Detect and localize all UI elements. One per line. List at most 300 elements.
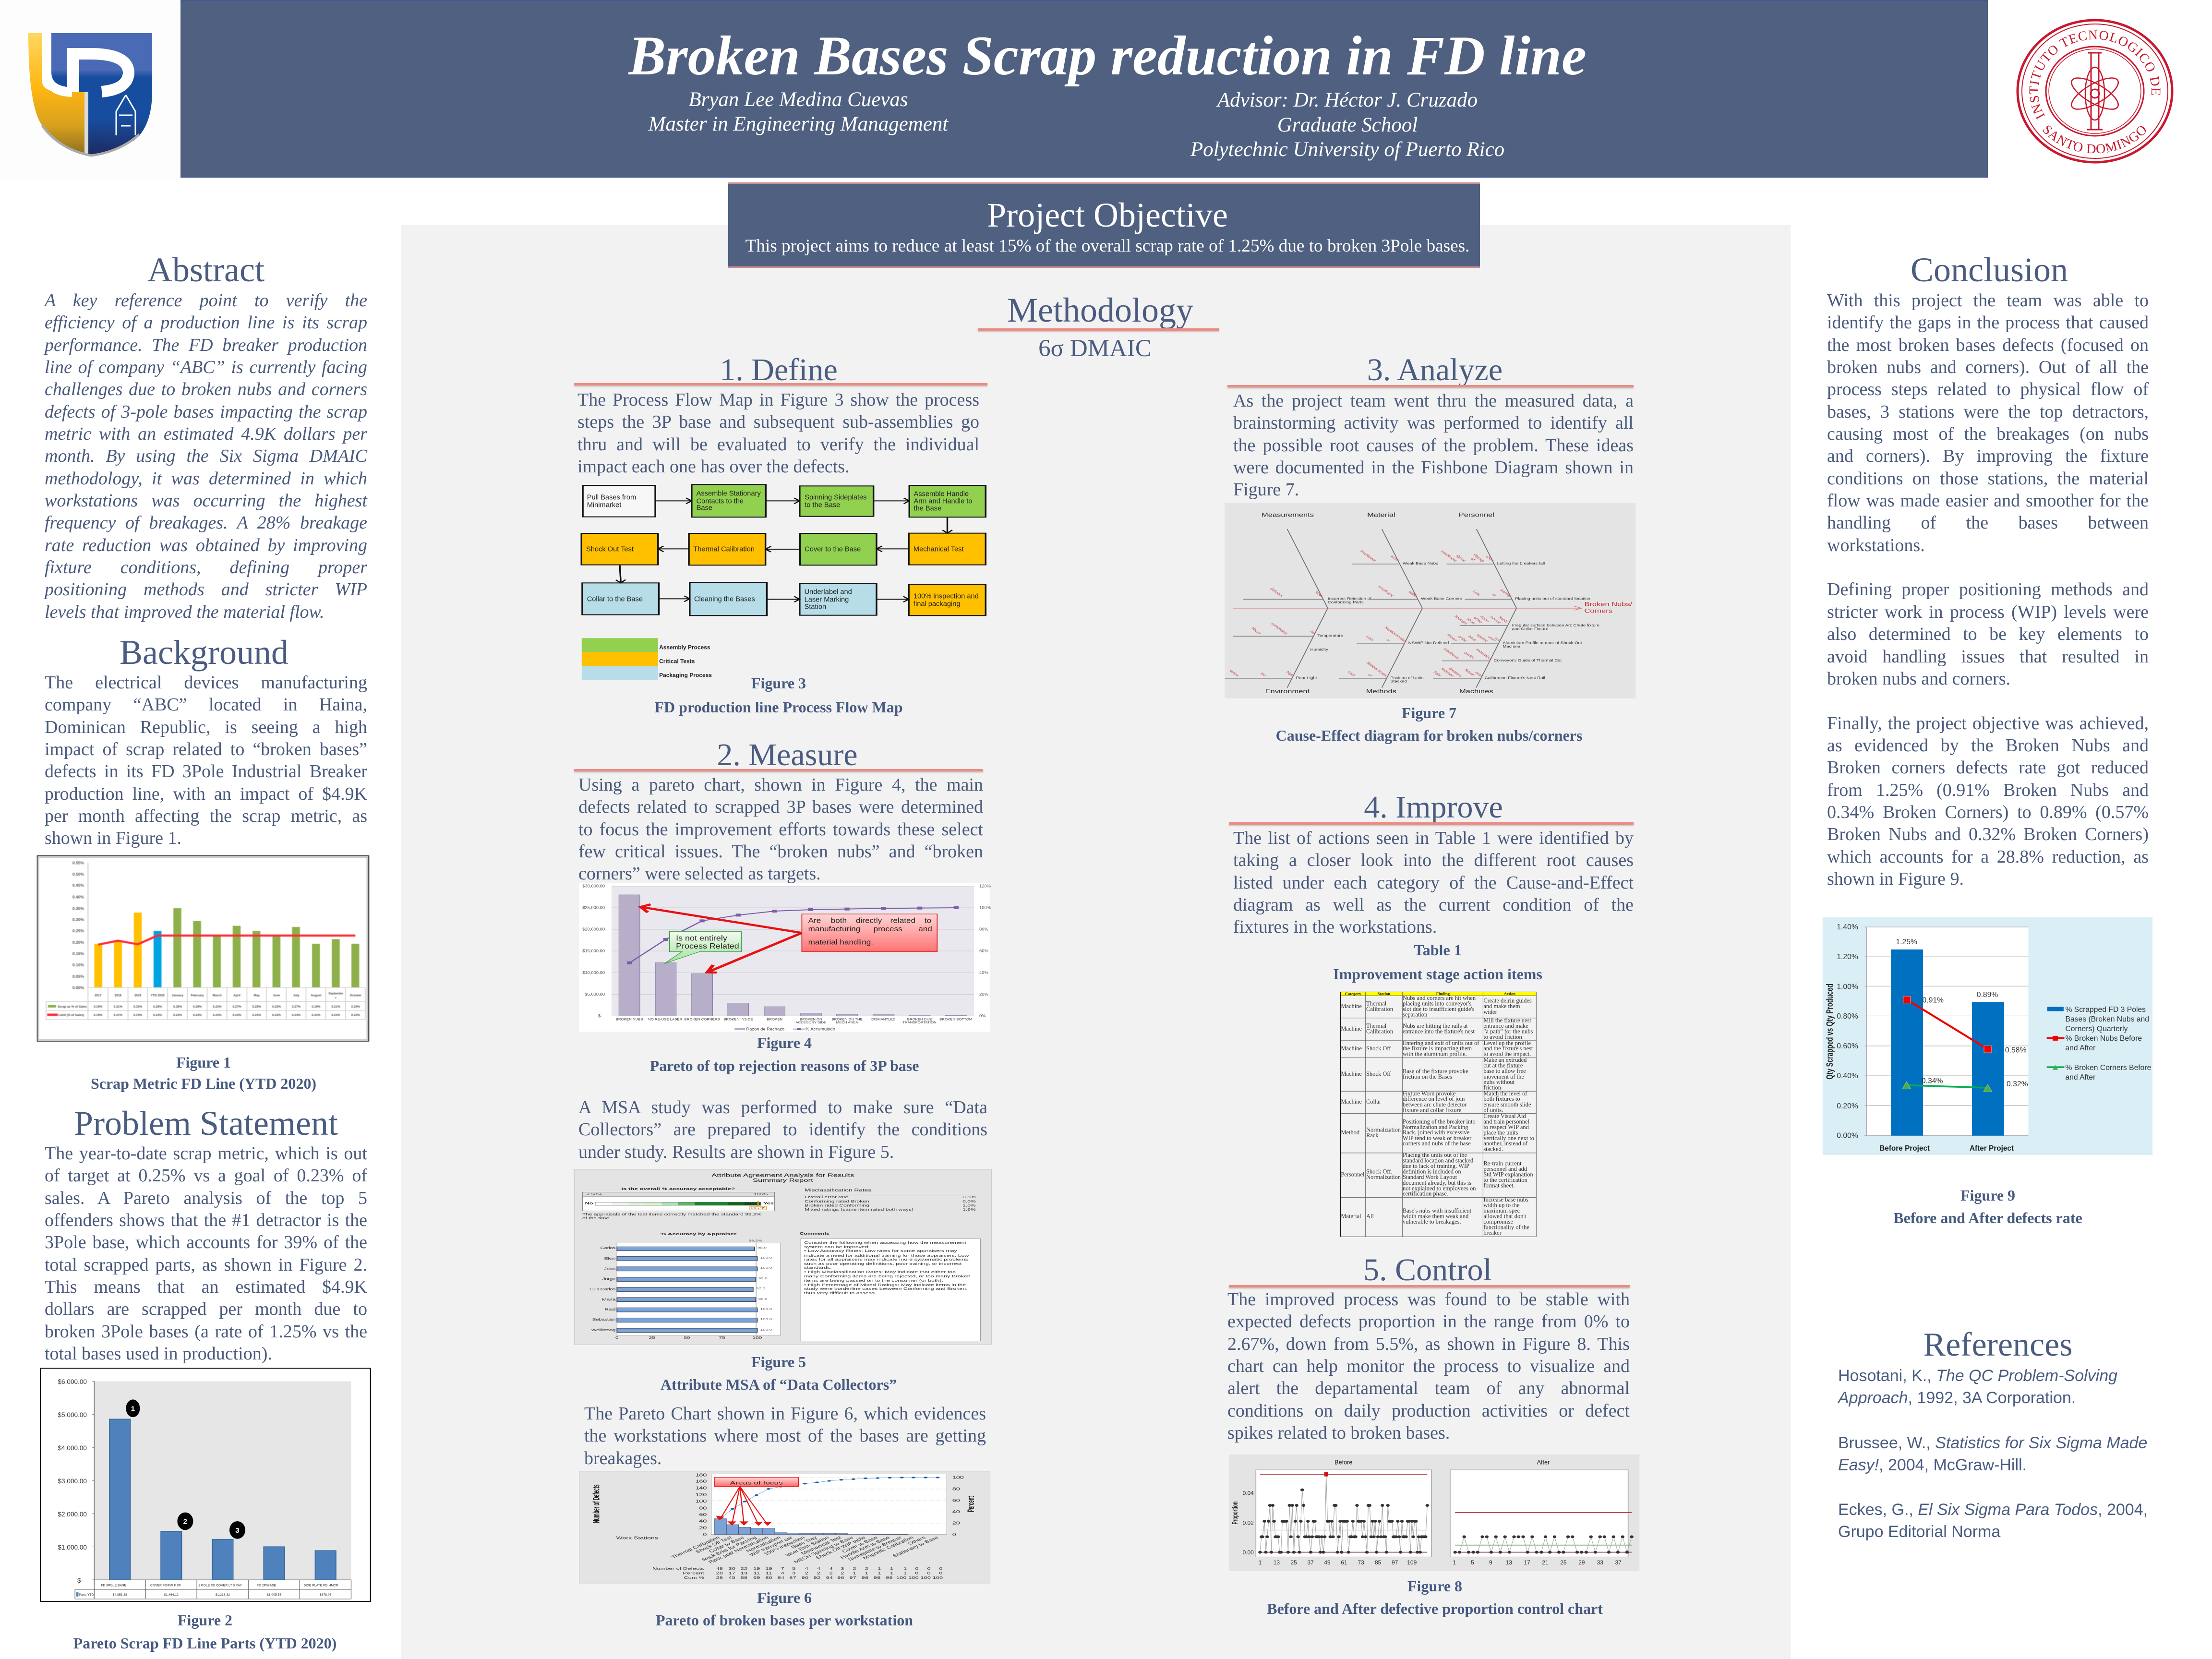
- data table: 19: [753, 1567, 760, 1571]
- y axis labels: 0.55%: [72, 861, 84, 866]
- sub-cause labels: of: [1384, 638, 1391, 642]
- sub-cause labels: [1228, 550, 1513, 678]
- data table: 1: [903, 1567, 907, 1571]
- accuracy by appraiser chart: 100.0: [760, 1328, 772, 1331]
- improve text: The list of actions seen in Table 1 were identified by: [1233, 828, 1634, 848]
- chart legend: [2047, 1006, 2152, 1082]
- data table: 19: [765, 1567, 772, 1571]
- conclusion text: identify the gaps in the process that caused: [1827, 313, 2149, 333]
- axis labels: 80%: [979, 927, 988, 932]
- table cells: Standard Work Layout: [1403, 1174, 1457, 1180]
- define text: impact each one has over the defects.: [577, 457, 850, 477]
- sub-cause labels: fixture: [1463, 669, 1476, 676]
- table cells: Nubs are hitting the rails at: [1403, 1022, 1468, 1029]
- data table: 0.23%: [252, 1013, 261, 1017]
- flow labels: final packaging: [914, 601, 961, 608]
- axis labels: 20%: [979, 992, 988, 997]
- y axis labels: 1.00%: [1837, 983, 1858, 991]
- axes labels: 0: [952, 1532, 956, 1537]
- sub-cause labels: of the: [1456, 635, 1468, 642]
- y labels: [58, 1378, 87, 1584]
- table cells: definition is included on: [1403, 1168, 1461, 1175]
- table cells: between arc chute detector: [1403, 1101, 1467, 1108]
- measure text: defects related to scrapped 3P bases were determined: [578, 797, 983, 817]
- accuracy by appraiser chart: Luis Carlos: [589, 1287, 616, 1291]
- figure 5 caption: [661, 1353, 897, 1393]
- sub-cause labels: Placing: [1472, 553, 1486, 563]
- axis labels: $-: [598, 1014, 602, 1018]
- y axis labels: 0.00%: [1837, 1132, 1858, 1140]
- figure 4 caption: Pareto of top rejection reasons of 3P base: [650, 1057, 919, 1074]
- flow labels: Assemble Stationary: [697, 490, 761, 498]
- sub-cause labels: levels: [1497, 616, 1509, 623]
- data table: 0.23%: [232, 1013, 241, 1017]
- data table: 2: [841, 1571, 844, 1575]
- before chart: 0.00: [1243, 1549, 1254, 1556]
- table cells: corners and nubs of the base: [1403, 1140, 1471, 1147]
- figure 7 caption: Cause-Effect diagram for broken nubs/corners: [1276, 727, 1582, 744]
- flow labels: Minimarket: [587, 502, 621, 509]
- data table: 5: [792, 1567, 796, 1571]
- analyze underline: [1227, 385, 1634, 387]
- table cells: Calibration: [1366, 1028, 1394, 1035]
- poster title: Broken Bases Scrap reduction in FD line: [628, 25, 1587, 87]
- measure text: [578, 775, 983, 884]
- before chart: 0.02: [1243, 1520, 1254, 1527]
- accuracy by appraiser chart: 100.0: [760, 1266, 772, 1269]
- table cells: [1341, 995, 1534, 1236]
- flow labels: Shock Out Test: [586, 545, 634, 553]
- y axis labels: 0.20%: [1837, 1102, 1858, 1110]
- conclusion text: Finally, the project objective was achieved,: [1827, 713, 2149, 733]
- axes labels: 20: [952, 1521, 960, 1526]
- background text: shown in Figure 1.: [45, 828, 181, 848]
- comments box: such as poor operating definitions, poor training, or incorrect: [804, 1262, 962, 1266]
- data table: 11: [766, 1571, 772, 1575]
- report title: Attribute Agreement Analysis for Results: [711, 1173, 854, 1178]
- data table: 0: [927, 1571, 931, 1575]
- table cells: breaker: [1483, 1229, 1502, 1236]
- before chart: [1243, 1470, 1431, 1566]
- improve underline: [1229, 822, 1634, 825]
- callout: manufacturing process: and: [918, 926, 932, 933]
- y axis labels: 0.20%: [72, 940, 84, 945]
- figure 4 caption: Figure 4: [757, 1034, 812, 1051]
- data table: 2: [853, 1567, 856, 1571]
- flow labels: the Base: [914, 505, 941, 513]
- sub-cause labels: offset: [1465, 618, 1477, 625]
- table cells: Machine: [1341, 1003, 1362, 1010]
- axes labels: 60: [952, 1498, 960, 1503]
- accuracy gauge: of the time.: [582, 1216, 611, 1220]
- abstract text: month. By using the Six Sigma DMAIC: [45, 446, 367, 466]
- conclusion text: [1827, 289, 2149, 890]
- data table: 2018: [115, 994, 121, 998]
- data table: 2019: [134, 994, 142, 998]
- comments box: Comments: [800, 1232, 830, 1236]
- author block: Bryan Lee Medina Cuevas: [688, 88, 908, 111]
- conclusion text: stricter work in process (WIP) levels were: [1827, 602, 2149, 622]
- reference 1: Hosotani, K., The QC Problem-Solving: [1838, 1367, 2117, 1385]
- sub-cause labels: Standardization: [1365, 661, 1390, 678]
- flow labels: Station: [805, 603, 826, 611]
- flow labels: Cleaning the Bases: [694, 595, 755, 603]
- after chart: 17: [1524, 1559, 1530, 1566]
- accuracy by appraiser chart: 75: [719, 1336, 725, 1340]
- bars: [714, 1519, 908, 1535]
- figure 1: scrap metric chart: [37, 856, 369, 1041]
- after chart: 37: [1615, 1559, 1622, 1566]
- before chart: 61: [1341, 1559, 1347, 1566]
- misclassification rates: Conforming rated Broken: [805, 1200, 869, 1203]
- data table: 4: [817, 1567, 820, 1571]
- data table: FD 3POLE BASE: [101, 1584, 127, 1587]
- data table: Percent: [683, 1571, 704, 1575]
- data table: 58: [741, 1576, 747, 1580]
- effect label: [1584, 601, 1632, 614]
- table cells: placing units into conveyor's: [1403, 1000, 1471, 1007]
- workstation labels: MECH Spinning to Base: [793, 1536, 855, 1564]
- table cells: personnel and add: [1483, 1166, 1527, 1172]
- data table: 98: [862, 1576, 868, 1580]
- sub-cause labels: Lack: [1472, 590, 1482, 597]
- flow boxes: [581, 484, 986, 615]
- data table: 2: [805, 1571, 808, 1575]
- conclusion text: process steps related to physical flow of: [1827, 379, 2149, 399]
- reference 3: Grupo Editorial Norma: [1838, 1523, 2000, 1541]
- data table: 1: [865, 1571, 868, 1575]
- table cells: to avoid the impact.: [1483, 1051, 1531, 1058]
- data table: FD 2P08ASE: [257, 1584, 276, 1587]
- table cells: Method: [1341, 1129, 1360, 1136]
- conclusion text: 0.34% Broken Corners) to 0.89% (0.57%: [1827, 802, 2149, 822]
- define text: steps the 3P base and subsequent sub-assemblies go: [577, 412, 979, 432]
- callout: manufacturing process: to: [925, 917, 931, 925]
- table cells: due to lack of training. WIP: [1403, 1163, 1469, 1169]
- heading: problem statement: Problem Statement: [74, 1104, 338, 1142]
- figure 4 caption: [650, 1034, 919, 1074]
- table cells: Create Visual Aid: [1483, 1113, 1527, 1119]
- accuracy by appraiser chart: 100.0: [760, 1318, 772, 1321]
- data table: Scrap as % of Sales: [58, 1005, 87, 1009]
- cause labels: Conforming Parts: [1328, 600, 1364, 604]
- table cells: Rack: [1366, 1132, 1379, 1139]
- central grey panel: [401, 225, 1791, 1659]
- sub-cause labels: Units: [1484, 555, 1495, 562]
- table cells: Normalization: [1366, 1126, 1401, 1133]
- data table: 1: [890, 1567, 893, 1571]
- problem statement text: This means that an estimated $4.9K: [45, 1277, 367, 1297]
- analyze text: the possible root causes of the problem. These ideas: [1233, 435, 1634, 456]
- control text: alert the departamental team of any abnormal: [1227, 1378, 1630, 1398]
- data table: 3: [792, 1571, 796, 1575]
- comments box: rates for all appraisers may indicate more systematic problems,: [804, 1258, 970, 1262]
- accuracy by appraiser chart: % Accuracy by Appraiser: [661, 1232, 737, 1236]
- chart legend: Bases (Broken Nubs and: [2065, 1015, 2149, 1023]
- category labels: BROKEN CORNERS: [685, 1017, 720, 1021]
- data table: 22: [741, 1567, 747, 1571]
- arrows: red arrows to bars: [641, 904, 802, 973]
- figure 8: before and after control charts: After: [1537, 1459, 1550, 1466]
- figure 3: process flow map: [581, 484, 986, 680]
- figure 8: before and after control charts: [1229, 1455, 1639, 1571]
- control text: expected defects proportion in the range from 0% to: [1227, 1311, 1630, 1332]
- reference 1: Approach, 1992, 3A Corporation.: [1838, 1389, 2076, 1407]
- define text: [577, 390, 979, 477]
- reference 2: Brussee, W., Statistics for Six Sigma Made: [1838, 1434, 2147, 1452]
- cumulative line: [719, 1477, 939, 1519]
- data table: 0.25%: [153, 1005, 162, 1009]
- comments box: • Low Accuracy Rates: Low rates for some appraisers may: [804, 1249, 958, 1253]
- figure 9 caption: Figure 9: [1960, 1187, 2015, 1204]
- data table: Septembe: [328, 992, 343, 995]
- table cells: document already, but this is: [1403, 1179, 1471, 1186]
- workstation labels: [616, 1536, 940, 1564]
- conclusion text: as evidenced by the Broken Nubs and: [1827, 735, 2149, 756]
- misclassification rates: 1.6%: [962, 1208, 976, 1212]
- category headings: Personnel: [1459, 512, 1494, 518]
- accuracy by appraiser chart: 99.0: [758, 1277, 768, 1280]
- comments box: [800, 1232, 980, 1341]
- flow legend: Packaging Process: [659, 672, 712, 679]
- figure 3 caption: [654, 674, 903, 716]
- figure 6 caption: Figure 6: [757, 1589, 812, 1606]
- bars: [619, 895, 966, 1016]
- data table: October: [349, 994, 362, 998]
- numbered badges: 1: [131, 1405, 135, 1413]
- figure 7 caption: Figure 7: [1402, 704, 1456, 721]
- axes labels: 160: [695, 1479, 707, 1484]
- data table: 0: [915, 1567, 919, 1571]
- flow labels: 100% inspection and: [914, 593, 979, 601]
- data table: 3: [841, 1567, 844, 1571]
- msa text: under study. Results are shown in Figure 5.: [578, 1142, 894, 1162]
- y axis labels: 1.20%: [1837, 953, 1858, 961]
- table cells: nubs without: [1483, 1079, 1515, 1085]
- table cells: entrance into the fixture's nest: [1403, 1028, 1475, 1035]
- abstract text: workstations was occurring the highest: [45, 491, 367, 511]
- figure 8 caption: Before and After defective proportion control chart: [1267, 1600, 1603, 1617]
- figure 3 caption: Figure 3: [751, 674, 806, 692]
- cause labels: Letting the breakers fall: [1497, 561, 1545, 565]
- table cells: standard location and stacked: [1403, 1157, 1474, 1164]
- control text: conditions on daily production activities or defect: [1227, 1401, 1630, 1421]
- sub-cause labels: Insufficient: [1359, 550, 1377, 562]
- pareto workstation text: The Pareto Chart shown in Figure 6, which evidences: [584, 1404, 986, 1424]
- problem statement text: 3Pole base, which accounts for 39% of the: [45, 1232, 367, 1252]
- table cells: Collar: [1366, 1098, 1382, 1105]
- table cells: Std WIP explanation: [1483, 1171, 1533, 1178]
- conclusion text: handling of the bases between: [1827, 513, 2149, 533]
- cause labels: Irregular surface between Arc Chute fixture: [1512, 623, 1599, 627]
- table cells: Entering and exit of units out of: [1403, 1040, 1479, 1046]
- msa text: Collectors” are prepared to identify the conditions: [578, 1119, 987, 1140]
- data table: 2: [817, 1571, 820, 1575]
- define text: thru and will be evaluated to verify the individual: [577, 434, 979, 455]
- define text: The Process Flow Map in Figure 3 show the process: [577, 390, 979, 410]
- abstract text: [43, 290, 368, 622]
- table cells: Level up the profile: [1483, 1040, 1531, 1046]
- comments box: standards.: [804, 1266, 832, 1270]
- workstation labels: Magnetic Calibration: [862, 1536, 915, 1560]
- bars: [94, 908, 359, 987]
- main bones: [1225, 529, 1516, 688]
- analyze text: Figure 7.: [1233, 480, 1299, 500]
- table header: [1341, 991, 1536, 996]
- table cells: not explained to employees on: [1403, 1185, 1476, 1191]
- y axis labels: 0.15%: [72, 951, 84, 956]
- comments box: items are being passed on to the consumer (or both).: [804, 1279, 943, 1283]
- abstract text: rate reduction was obtained by improving: [45, 535, 367, 555]
- flow labels: Spinning Sideplates: [805, 494, 867, 502]
- sub-cause labels: against: [1475, 634, 1489, 642]
- axes labels: 80: [952, 1487, 960, 1491]
- data table: $1,464.12: [164, 1593, 179, 1597]
- chart legend: [734, 1027, 835, 1031]
- pareto workstation text: the workstations where most of the bases are getting: [584, 1426, 986, 1446]
- data table: 4: [781, 1571, 784, 1575]
- conclusion text: With this project the team was able to: [1827, 290, 2149, 311]
- accuracy by appraiser chart: 100.0: [760, 1256, 772, 1259]
- data table: [46, 987, 365, 1020]
- sub-cause labels: Insufficient: [1377, 585, 1395, 598]
- data table: Cum %: [684, 1576, 704, 1580]
- data table: 17: [728, 1571, 735, 1575]
- table cells: of units.: [1483, 1106, 1503, 1113]
- measure text: few critical issues. The “broken nubs” and “broken: [578, 842, 983, 862]
- figure 4: pareto of rejection reasons: [579, 883, 991, 1032]
- sub-cause labels: units: [1487, 636, 1497, 642]
- heading: background: Background: [120, 633, 289, 672]
- flow labels: Mechanical Test: [914, 545, 964, 553]
- data table: June: [273, 994, 280, 998]
- data labels: [1896, 938, 2028, 1088]
- axis labels: [582, 884, 991, 1018]
- accuracy by appraiser chart: 97.0: [756, 1287, 766, 1290]
- y axis labels: 0.40%: [1837, 1072, 1858, 1080]
- workstation labels: Mechanical Test: [800, 1536, 843, 1556]
- y axis labels: 0.50%: [72, 872, 84, 877]
- data table: 13: [741, 1571, 747, 1575]
- flow labels: [586, 490, 979, 611]
- flow labels: to the Base: [805, 502, 840, 509]
- figure 6: pareto of defects per workstation: [579, 1471, 990, 1584]
- conclusion text: broken nubs and corners.: [1827, 669, 2010, 689]
- background text: The electrical devices manufacturing: [45, 673, 367, 693]
- numbered badges: 3: [235, 1527, 240, 1535]
- data table: January: [172, 994, 184, 998]
- table cells: Re-train current: [1483, 1160, 1522, 1167]
- sub-cause labels: too: [1259, 672, 1268, 677]
- data table: 28: [716, 1576, 723, 1580]
- project objective text: This project aims to reduce at least 15% of the overall scrap rate of 1.25% due to broken 3Pole bases.: [745, 236, 1469, 256]
- table cells: the fixture is impacting them: [1403, 1045, 1472, 1052]
- table cells: Match the level of: [1483, 1090, 1527, 1097]
- advisor block: Graduate School: [1277, 113, 1418, 136]
- conclusion text: Broken corners defects rate got reduced: [1827, 757, 2149, 778]
- spine arrow: [1233, 606, 1582, 610]
- data table: 94: [826, 1576, 833, 1580]
- x axis labels: Before Project: [1879, 1144, 1930, 1153]
- before chart: 37: [1307, 1559, 1314, 1566]
- cause labels: Weak Base Corners: [1421, 597, 1462, 601]
- accuracy by appraiser chart: María: [602, 1298, 616, 1301]
- workstation labels: Shock Off Test: [695, 1536, 734, 1554]
- data table: July: [293, 994, 300, 998]
- table cells: compromise: [1483, 1218, 1513, 1225]
- cumulative line: [627, 906, 959, 964]
- data table: 0.23%: [193, 1013, 202, 1017]
- cause labels: Temperature: [1317, 634, 1343, 637]
- sub-cause labels: lamps: [1228, 669, 1240, 677]
- workstation labels: Rack Brks for Packing: [701, 1536, 758, 1562]
- callout: manufacturing process: [802, 914, 937, 952]
- callout: manufacturing process: material handling.: [808, 939, 873, 946]
- improve text: taking a closer look into the different root causes: [1233, 850, 1634, 870]
- advisor block: [1190, 89, 1504, 161]
- background text: [45, 673, 367, 848]
- data table: 48: [716, 1567, 723, 1571]
- effect label: Broken Nubs/: [1584, 601, 1632, 608]
- figure 8: before and after control charts: Before: [1334, 1459, 1352, 1466]
- sub-cause labels: compressor: [1270, 622, 1289, 636]
- axes labels: 40: [952, 1510, 960, 1514]
- data labels: 1.25%: [1896, 938, 1917, 946]
- data table: 100: [896, 1576, 907, 1580]
- abstract text: A key reference point to verify the: [45, 290, 367, 311]
- y axis labels: 1.40%: [1837, 923, 1858, 931]
- cause labels: Position of Units: [1390, 676, 1424, 680]
- table cells: Personnel: [1341, 1171, 1365, 1178]
- analyze text: As the project team went thru the measured data, a: [1233, 391, 1634, 411]
- background text: production line, with an impact of $4.9K: [45, 784, 367, 804]
- data table: 45: [728, 1576, 735, 1580]
- callout: manufacturing process: related: [890, 917, 915, 925]
- accuracy by appraiser chart: Elvin: [604, 1257, 615, 1261]
- reference 3: [1838, 1500, 2148, 1541]
- table cells: Create delrin guides: [1483, 998, 1532, 1004]
- table cells: to respect WIP and: [1483, 1124, 1529, 1130]
- axes labels: Number of Defects: [591, 1484, 602, 1523]
- table 1 caption: Table 1: [1414, 941, 1462, 959]
- data table: 99: [874, 1576, 880, 1580]
- table cells: slot due to insufficient guide's: [1403, 1006, 1475, 1012]
- table cells: Thermal: [1366, 1022, 1387, 1029]
- axis labels: $20,000.00: [582, 927, 605, 932]
- axes labels: 60: [699, 1513, 707, 1517]
- axis labels: $25,000.00: [582, 905, 605, 910]
- table cells: Machine: [1341, 1070, 1362, 1077]
- data table: 0: [939, 1567, 942, 1571]
- data table: 0.23%: [153, 1013, 162, 1017]
- y axis labels: 0.30%: [72, 917, 84, 922]
- data table: 1: [903, 1571, 907, 1575]
- axes labels: 100: [952, 1476, 964, 1480]
- sub-cause labels: Tight: [1432, 670, 1443, 677]
- figure 6 caption: Pareto of broken bases per workstation: [656, 1611, 913, 1629]
- data table: 69: [753, 1576, 760, 1580]
- analyze text: were documented in the Fishbone Diagram shown in: [1233, 457, 1634, 478]
- data table: [652, 1567, 943, 1580]
- data table: 97: [849, 1576, 856, 1580]
- sub-cause labels: Lack: [1346, 671, 1357, 677]
- arrows: areas of focus: [717, 1487, 771, 1525]
- y axis labels: [1824, 923, 1858, 1140]
- data table: YTD 2020: [151, 994, 165, 998]
- table header: Finding: [1436, 991, 1450, 996]
- figure 9: before and after defects rate chart: [1823, 917, 2152, 1155]
- table cells: and train personnel: [1483, 1118, 1529, 1125]
